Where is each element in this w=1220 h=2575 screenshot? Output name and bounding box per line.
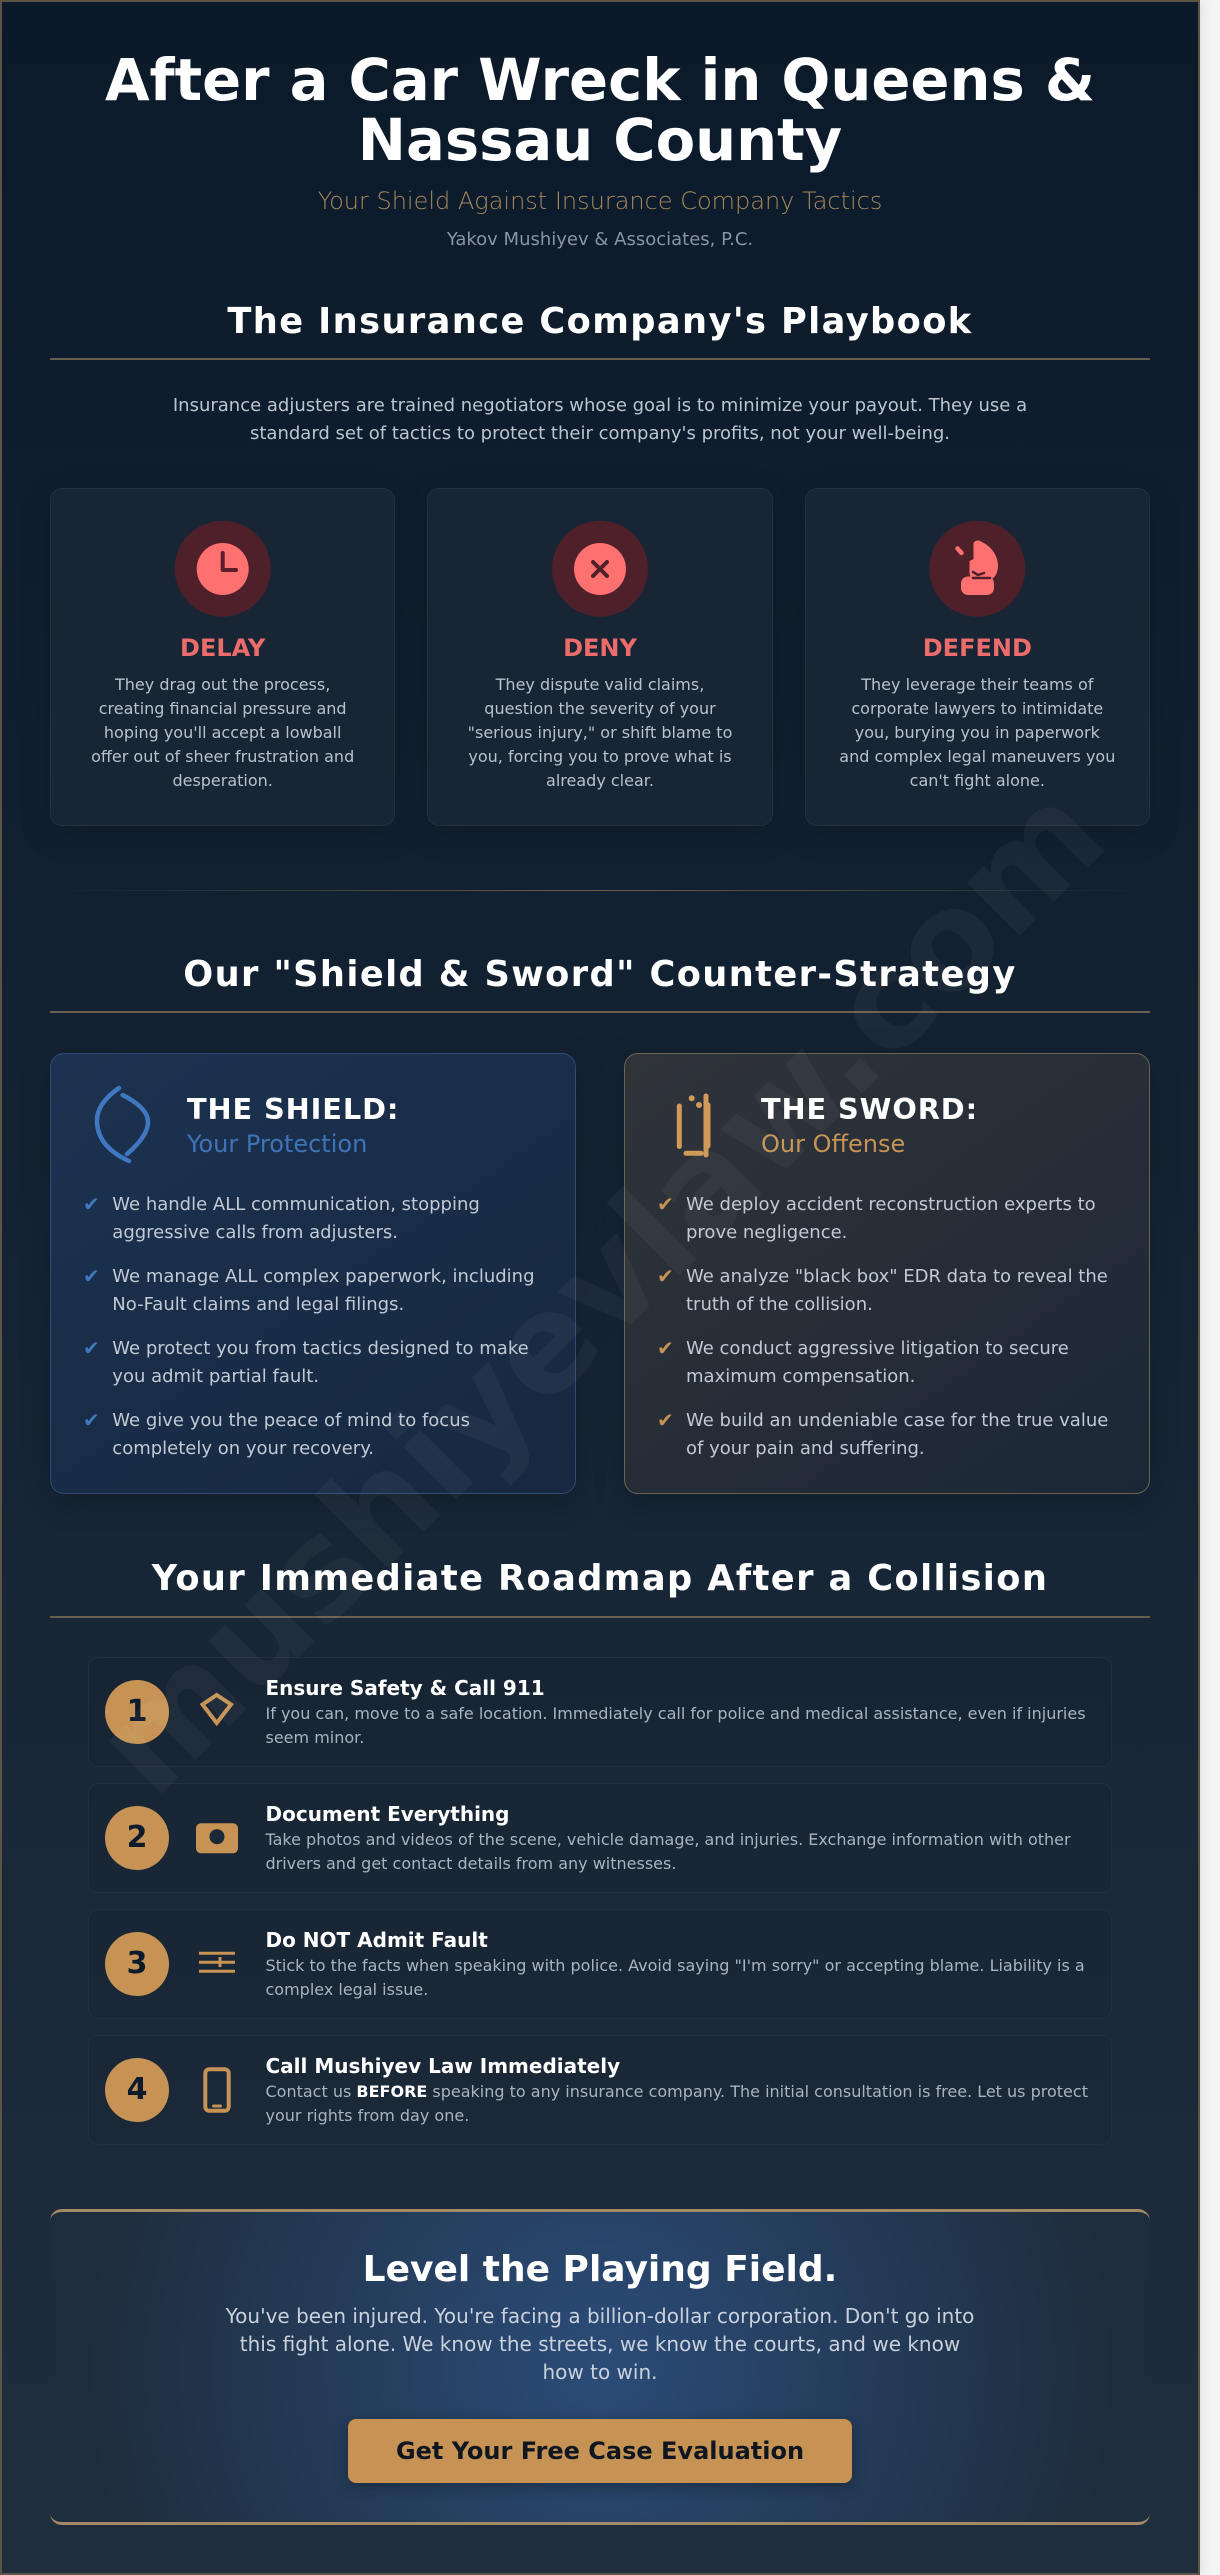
heading: counter-strategy: Our "Shield & Sword" Counter-Strategy xyxy=(183,954,1017,995)
item 4 xyxy=(112,1410,470,1458)
item 3 xyxy=(112,1338,529,1386)
delay text: They drag out the process, xyxy=(115,675,330,694)
step 1 number xyxy=(105,1680,169,1744)
item 2 xyxy=(686,1266,1108,1314)
icon: diamond xyxy=(200,1692,234,1726)
icon: camera xyxy=(196,1823,238,1854)
step 1 text: If you can, move to a safe location. Immediately call for police and medical assistance, even if injuries xyxy=(266,1704,1086,1723)
step 2 number: 2 xyxy=(127,1820,147,1855)
step 4 text: your rights from day one. xyxy=(266,2106,469,2125)
title: Nassau County xyxy=(358,107,842,174)
defend text: you, burying you in paperwork xyxy=(855,723,1100,742)
item 2: We analyze "black box" EDR data to reveal the xyxy=(686,1266,1108,1286)
deny heading: DENY xyxy=(563,634,637,662)
item 3: you admit partial fault. xyxy=(112,1366,319,1386)
item 2: We manage ALL complex paperwork, including xyxy=(112,1266,534,1286)
step 2 text: drivers and get contact details from any witnesses. xyxy=(266,1854,676,1873)
sword heading: THE SWORD: xyxy=(761,1092,978,1126)
defend heading: DEFEND xyxy=(923,634,1032,662)
step 2 number xyxy=(105,1806,169,1870)
cta heading: Level the Playing Field. xyxy=(363,2249,837,2290)
shield heading: THE SHIELD: xyxy=(187,1092,399,1126)
panel: step 1 xyxy=(88,1657,1112,1767)
defend text: corporate lawyers to intimidate xyxy=(851,699,1103,718)
item 4: We give you the peace of mind to focus xyxy=(112,1410,470,1430)
step 1 title: Ensure Safety & Call 911 xyxy=(266,1676,545,1700)
subtitle: Your Shield Against Insurance Company Tactics xyxy=(318,187,882,215)
title xyxy=(105,47,1095,174)
item 1: We deploy accident reconstruction experts to xyxy=(686,1194,1096,1214)
step 3 title: Do NOT Admit Fault xyxy=(266,1928,488,1952)
step 3 text xyxy=(266,1956,1085,1999)
icon: scale lines xyxy=(199,1952,235,1973)
cta text: this fight alone. We know the streets, we know the courts, and we know xyxy=(240,2332,960,2356)
delay text xyxy=(91,675,354,790)
check 3: ✔ xyxy=(83,1336,100,1360)
shield checklist xyxy=(83,1192,534,1458)
step 1 number: 1 xyxy=(127,1694,147,1729)
deny text xyxy=(468,675,732,790)
panel: delay card xyxy=(50,488,395,826)
step 1 text: seem minor. xyxy=(266,1728,364,1747)
item 2 xyxy=(112,1266,534,1314)
shield subheading: Your Protection xyxy=(187,1130,367,1158)
cta button: Get Your Free Case Evaluation xyxy=(396,2437,804,2465)
step 2 title: Document Everything xyxy=(266,1802,509,1826)
panel: step 2 xyxy=(88,1783,1112,1893)
intro text: Insurance adjusters are trained negotiators whose goal is to minimize your payout. They use a xyxy=(173,394,1027,416)
cta text xyxy=(226,2304,974,2384)
item 4: We build an undeniable case for the true value xyxy=(686,1410,1108,1430)
item 3: We protect you from tactics designed to make xyxy=(112,1338,529,1358)
item 4: of your pain and suffering. xyxy=(686,1438,925,1458)
deny text: "serious injury," or shift blame to xyxy=(468,723,732,742)
item 1: aggressive calls from adjusters. xyxy=(112,1222,398,1242)
step 4 text xyxy=(266,2082,1088,2125)
item 4: completely on your recovery. xyxy=(112,1438,374,1458)
item 1 xyxy=(686,1194,1096,1242)
step 4 number xyxy=(105,2058,169,2122)
icon: shield xyxy=(94,1086,150,1164)
icon: sword xyxy=(676,1094,710,1158)
item 1 xyxy=(112,1194,480,1242)
delay text: creating financial pressure and xyxy=(99,699,347,718)
step 1 text xyxy=(266,1704,1086,1747)
step 3 text: complex legal issue. xyxy=(266,1980,428,1999)
heading: playbook: The Insurance Company's Playbook xyxy=(227,301,973,342)
icon: x mark xyxy=(552,520,648,617)
panel: step 3 xyxy=(88,1909,1112,2019)
item 3: We conduct aggressive litigation to secure xyxy=(686,1338,1069,1358)
check 2: ✔ xyxy=(657,1264,674,1288)
check 1: ✔ xyxy=(83,1192,100,1216)
sword subheading: Our Offense xyxy=(761,1130,905,1158)
step 4 title: Call Mushiyev Law Immediately xyxy=(266,2054,620,2078)
deny text: question the severity of your xyxy=(484,699,716,718)
step 4 number: 4 xyxy=(127,2072,147,2107)
item 3: maximum compensation. xyxy=(686,1366,915,1386)
defend text: can't fight alone. xyxy=(910,771,1045,790)
item 2: truth of the collision. xyxy=(686,1294,873,1314)
defend text xyxy=(839,675,1115,790)
delay text: desperation. xyxy=(172,771,273,790)
heading: roadmap: Your Immediate Roadmap After a Collision xyxy=(152,1558,1048,1599)
firm name: Yakov Mushiyev & Associates, P.C. xyxy=(447,229,753,250)
intro text: standard set of tactics to protect their company's profits, not your well-being. xyxy=(250,423,950,444)
cta button xyxy=(348,2419,852,2483)
deny text: They dispute valid claims, xyxy=(496,675,704,694)
delay text: offer out of sheer frustration and xyxy=(91,747,354,766)
step 2 text xyxy=(265,1830,1071,1873)
defend text: and complex legal maneuvers you xyxy=(839,747,1115,766)
deny text: already clear. xyxy=(546,771,654,790)
step 2 text: Take photos and videos of the scene, vehicle damage, and injuries. Exchange information with other xyxy=(266,1830,1071,1849)
panel: defend card xyxy=(805,488,1150,826)
panel: the sword xyxy=(624,1053,1150,1494)
panel: call to action xyxy=(50,2209,1150,2525)
check 3: ✔ xyxy=(657,1336,674,1360)
title: After a Car Wreck in Queens & xyxy=(105,47,1095,114)
sword checklist xyxy=(657,1192,1108,1458)
check 1: ✔ xyxy=(657,1192,674,1216)
delay heading: DELAY xyxy=(180,634,265,662)
step 3 number: 3 xyxy=(127,1946,147,1981)
defend text: They leverage their teams of xyxy=(861,675,1093,694)
item 1: We handle ALL communication, stopping xyxy=(112,1194,480,1214)
panel: deny card xyxy=(427,488,773,826)
item 2: No-Fault claims and legal filings. xyxy=(112,1294,404,1314)
cta text: You've been injured. You're facing a billion-dollar corporation. Don't go into xyxy=(226,2304,974,2328)
check 2: ✔ xyxy=(83,1264,100,1288)
icon: hand xyxy=(929,520,1026,617)
watermark: mushiyevlaw.com xyxy=(65,755,1135,1825)
panel: the shield xyxy=(50,1053,576,1494)
panel: step 4 xyxy=(88,2035,1112,2145)
step 3 text: Stick to the facts when speaking with police. Avoid saying "I'm sorry" or accepting blame. Liability is a xyxy=(266,1956,1085,1975)
icon: clock xyxy=(174,520,271,617)
step 3 number xyxy=(105,1932,169,1996)
check 4: ✔ xyxy=(657,1408,674,1432)
item 1: prove negligence. xyxy=(686,1222,847,1242)
delay text: hoping you'll accept a lowball xyxy=(104,723,341,742)
intro text xyxy=(173,394,1027,444)
step 4 text: Contact us BEFORE speaking to any insurance company. The initial consultation is free. Let us protect xyxy=(266,2082,1088,2101)
icon: phone xyxy=(203,2067,231,2113)
cta text: how to win. xyxy=(542,2360,658,2384)
deny text: you, forcing you to prove what is xyxy=(468,747,732,766)
item 4 xyxy=(686,1410,1108,1458)
item 3 xyxy=(686,1338,1069,1386)
check 4: ✔ xyxy=(83,1408,100,1432)
